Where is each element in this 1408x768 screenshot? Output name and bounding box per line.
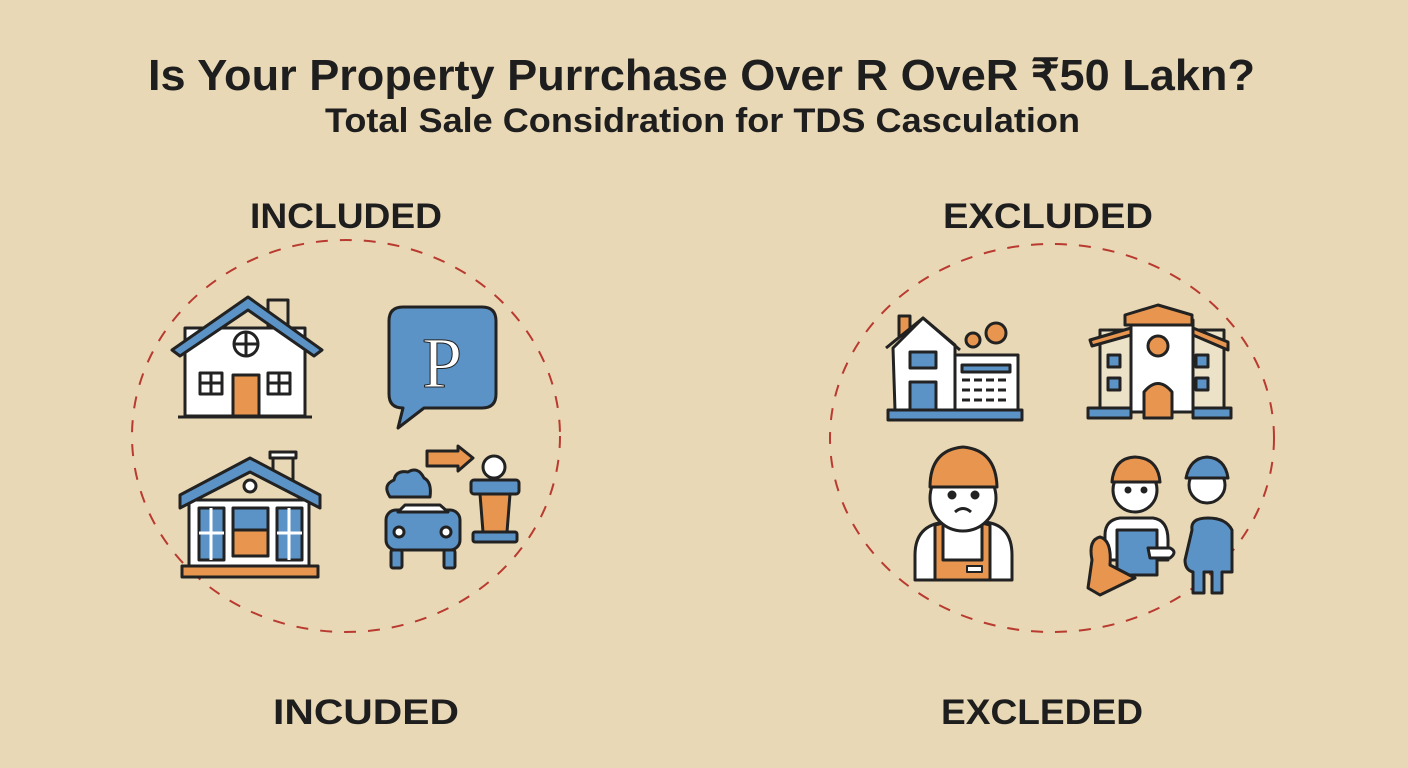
icon: house 2 xyxy=(180,452,320,577)
icon: sad worker xyxy=(915,447,1012,580)
footer label: excleded: EXCLEDED xyxy=(941,693,1143,732)
heading: excluded: EXCLUDED xyxy=(943,197,1153,236)
icon: house with office xyxy=(886,316,1022,420)
panel: included circle xyxy=(132,240,560,632)
footer label: incuded: INCUDED xyxy=(273,693,459,732)
subtitle: Total Sale Considration for TDS Casculation xyxy=(325,102,1080,140)
panel: excluded circle xyxy=(830,244,1274,632)
icon: institutional building xyxy=(1088,305,1231,418)
title: Is Your Property Purrchase Over R OveR ₹50 Lakn? xyxy=(148,51,1255,100)
icon: parking bubble: P xyxy=(422,323,462,403)
icon: workers with stamp xyxy=(1088,457,1232,595)
icon: parking bubble xyxy=(389,307,496,428)
heading: included: INCLUDED xyxy=(250,197,442,236)
icon: house 1 xyxy=(172,297,322,417)
icon: car, cloud, arrow, pedestal xyxy=(386,446,519,568)
